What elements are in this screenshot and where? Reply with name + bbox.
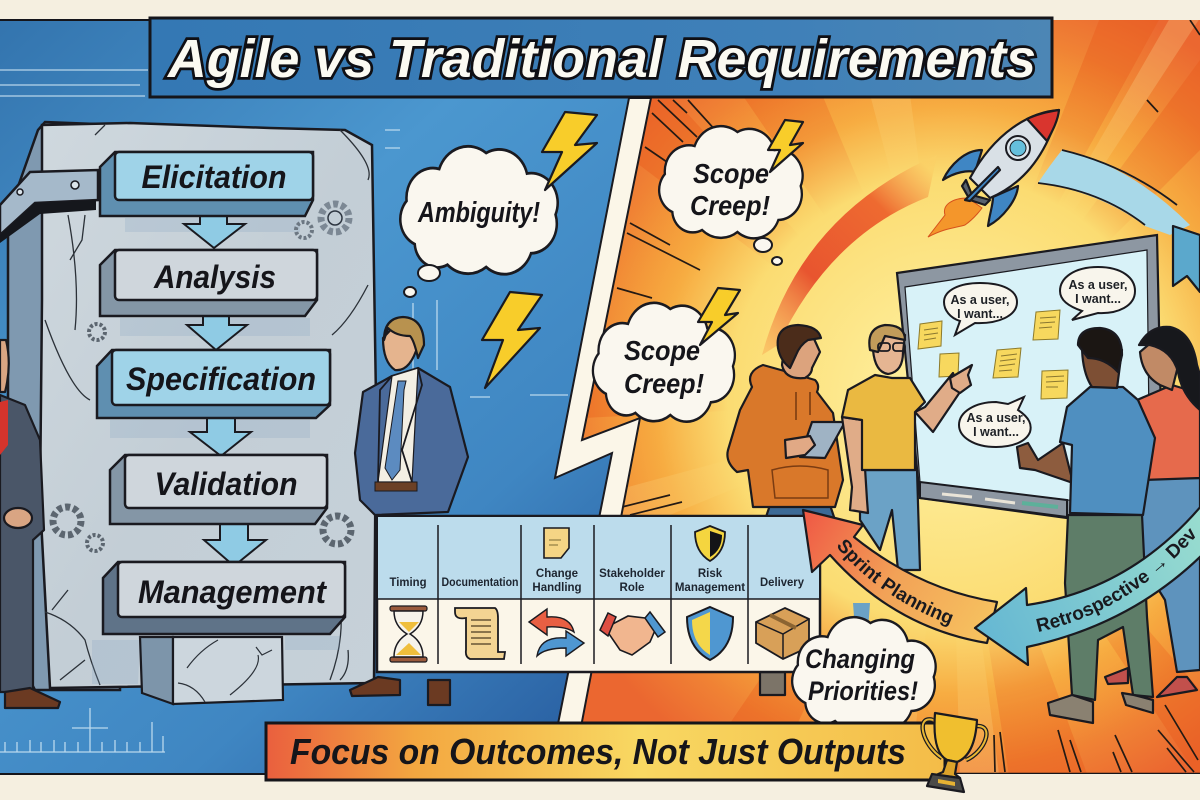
person: suited man at right (350, 317, 468, 705)
person: suited man at left (0, 340, 60, 708)
sticky note (1033, 310, 1060, 340)
cycle arrow: Sprint Planning: Sprint Planning (838, 540, 953, 627)
step: Analysis: Analysis (153, 259, 276, 295)
icon: lightning bolt (482, 292, 542, 388)
column label: Stakeholder Role: Role (620, 582, 644, 594)
whiteboard (897, 235, 1163, 518)
blue arc (1038, 150, 1190, 235)
column label: Stakeholder Role: Stakeholder (599, 568, 665, 580)
speech bubble (959, 397, 1031, 447)
column label: Change Handling: Handling (532, 582, 582, 594)
column label: Risk Management: Management (675, 582, 745, 594)
speech bubble: I want... (973, 425, 1019, 439)
icon: swap arrows (529, 609, 584, 656)
icon: lightning bolt (542, 112, 597, 190)
step: Elicitation: Elicitation (142, 159, 286, 195)
icon: handshake (600, 612, 665, 655)
process arrow: elicitation to analysis (184, 205, 245, 248)
step: Elicitation (100, 152, 313, 216)
step: Validation (110, 455, 327, 524)
bottom banner (266, 723, 945, 780)
person: orange hoodie man (727, 325, 870, 695)
speech bubble (1060, 267, 1135, 320)
cycle arrow: Retrospective to Delivery: Retrospective → Dev (1036, 528, 1195, 632)
sticky note (1041, 370, 1068, 399)
sticky note (918, 321, 942, 349)
speech bubble: I want... (1075, 292, 1121, 306)
step: Specification (97, 350, 330, 418)
icon: rocket (928, 110, 1059, 237)
column label: Documentation: Documentation (442, 577, 518, 589)
icon: shield (687, 607, 733, 660)
speech bubble (944, 283, 1017, 335)
person: blue shirt man from back (1017, 328, 1155, 723)
step: Management (103, 562, 345, 634)
title banner: Agile vs Traditional Requirements (166, 29, 1036, 89)
icon: trophy (923, 713, 986, 792)
thought cloud: Changing Priorities: Priorities! (808, 676, 918, 706)
icon: gears (53, 204, 351, 551)
column label: Change Handling: Change (536, 568, 578, 580)
column label: Timing: Timing (390, 577, 426, 589)
column label: Delivery: Delivery (760, 577, 805, 589)
step: Analysis (100, 250, 317, 316)
flame arc (762, 155, 937, 355)
step: Validation: Validation (154, 466, 298, 502)
metal bracket (0, 170, 98, 243)
comparison table (377, 516, 820, 672)
speech bubble: I want... (957, 307, 1003, 321)
step: Management: Management (138, 574, 327, 610)
icon: hourglass (390, 606, 427, 662)
icon: small shield (695, 526, 725, 561)
panel: agile orange background with rays (540, 18, 1200, 782)
process arrow: validation to management (204, 515, 266, 566)
arrow head: blue (1173, 226, 1200, 292)
process arrow: specification to validation (190, 412, 251, 456)
thought cloud: Scope Creep lower: Creep! (624, 368, 704, 399)
speech bubble: As a user, (966, 411, 1026, 425)
speech bubble: As a user, (1068, 278, 1128, 292)
cycle arrow: Sprint Planning (802, 508, 998, 644)
sticky note (939, 353, 959, 377)
stone monolith (8, 122, 376, 704)
thought cloud: Changing Priorities: Changing (805, 644, 915, 674)
icon: note (544, 528, 569, 558)
column label: Risk Management: Risk (698, 568, 723, 580)
person: yellow shirt man (842, 325, 972, 570)
thought cloud: Scope Creep lower (593, 303, 735, 422)
process arrow: analysis to specification (187, 305, 247, 350)
speech bubble: As a user, (950, 293, 1010, 307)
thought cloud: Ambiguity (400, 146, 558, 297)
icon: parcel box (756, 608, 809, 659)
thought cloud: Scope Creep top: Scope (693, 158, 769, 189)
bottom banner: Focus on Outcomes, Not Just Outputs (290, 731, 906, 772)
thought cloud: Changing Priorities (792, 617, 936, 729)
step: Specification: Specification (126, 361, 316, 397)
sticky note (993, 348, 1021, 378)
cycle arrow: Retrospective to Delivery (974, 506, 1200, 666)
zigzag divider (548, 98, 651, 774)
panel: traditional blue background (0, 20, 657, 774)
thought cloud: Scope Creep top (659, 126, 803, 265)
icon: scroll (455, 608, 505, 659)
thought cloud: Scope Creep top: Creep! (690, 190, 770, 221)
person: woman in coral shirt (1105, 327, 1200, 697)
thought cloud: Ambiguity: Ambiguity! (417, 197, 540, 229)
stone plinth (140, 637, 283, 704)
icon: lightning bolt (768, 120, 803, 172)
thought cloud: Scope Creep lower: Scope (624, 335, 700, 366)
icon: lightning bolt (698, 288, 740, 345)
